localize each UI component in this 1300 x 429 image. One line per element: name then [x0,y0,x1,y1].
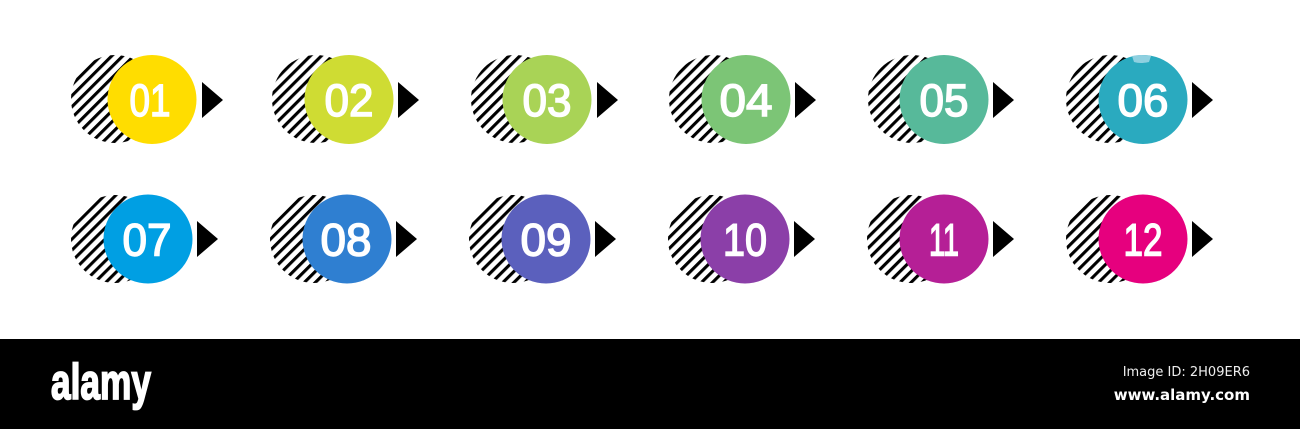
badge 07: 07 [122,214,172,266]
badge 02: 02 [324,75,374,126]
alamy logo: alamy [51,354,151,410]
badge 07 [71,194,218,284]
badge 12 [1066,194,1213,284]
badge 09 [469,194,616,284]
badge 11 [867,194,1014,284]
badge 01 [71,55,223,144]
badge 11: 11 [929,214,959,266]
website: www.alamy.com [1114,386,1250,404]
badge 05: 05 [920,75,968,126]
badge 02 [272,55,419,144]
badge 01: 01 [130,75,170,126]
badge 10: 10 [723,214,767,266]
badge 05 [868,55,1014,144]
badge 03: 03 [522,75,572,126]
footer band [0,339,1300,429]
badge 10 [668,194,815,284]
badge 03 [471,55,618,144]
badge 04 [669,55,816,144]
badge 08: 08 [320,214,372,266]
badge 06 [1066,55,1213,144]
badge 09: 09 [520,214,572,266]
image id: Image ID: 2H09ER6 [1123,365,1250,380]
badge 08 [270,194,417,284]
badge 12: 12 [1124,214,1162,266]
badge 04: 04 [720,75,772,126]
badge 06: 06 [1118,75,1168,126]
